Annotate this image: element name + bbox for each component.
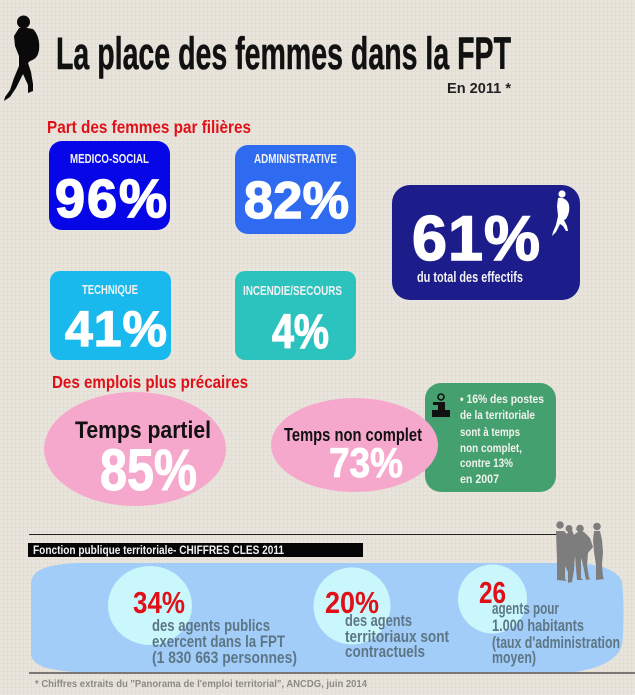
panel: medico-social: MEDICO-SOCIAL [70,151,149,166]
panel: technique [50,271,171,360]
heading bar: chiffres cles: Fonction publique territoriale- CHIFFRES CLES 2011 [33,543,284,557]
stat: 20%: contractuels [345,642,425,661]
stat: 34%: exercent dans la FPT [152,632,285,651]
panel: total 61%: 61% [412,204,540,274]
source footnote: * Chiffres extraits du "Panorama de l'emploi territorial", ANCDG, juin 2014 [35,679,367,690]
panel: administrative [235,145,356,234]
panel: medico-social: 96% [55,169,167,229]
panel: technique: 41% [65,301,167,357]
panel: total 61% [392,185,580,300]
note text: en 2007 [460,472,499,486]
note text: • 16% des postes [460,392,544,406]
note text: non complet, [460,441,522,455]
panel: temps non complet: Temps non complet [284,425,422,445]
panel: medico-social [49,141,170,230]
panel: total 61%: du total des effectifs [417,269,523,286]
stat: 20%: 20% [325,585,379,620]
panel: temps partiel: 85% [100,438,197,503]
stat: 20%: territoriaux sont [345,627,449,646]
icon: walking woman silhouette [4,16,39,101]
date note: En 2011 * [447,80,511,97]
stat: 34%: (1 830 663 personnes) [152,648,297,667]
panel: administrative: ADMINISTRATIVE [254,151,337,166]
panel: incendie/secours: 4% [272,306,329,359]
panel: incendie/secours: INCENDIE/SECOURS [243,283,342,298]
stat: 34%: 34% [133,585,185,620]
stat: 26: 26 [479,575,506,610]
stat: 20% [314,568,449,661]
stat: 34%: des agents publics [152,616,270,635]
stat: 20%: des agents [345,611,412,630]
note text: de la territoriale [460,408,535,422]
stat: 34% [108,566,297,667]
stat: 26: agents pour [492,599,559,618]
stat: 26 [458,564,620,667]
icon: information [432,394,450,417]
panel: administrative: 82% [244,172,349,230]
panel: info note [425,383,556,492]
stat: 26: moyen) [492,648,536,667]
note text: contre 13% [460,456,513,470]
note text [460,392,544,486]
stat: 26: 1.000 habitants [492,616,584,635]
panel: temps partiel [44,392,226,506]
note text: sont à temps [460,425,520,439]
icon: white walking woman [552,190,569,236]
panel: temps partiel: Temps partiel [75,417,211,444]
heading: des emplois plus precaires: Des emplois plus précaires [52,372,248,392]
icon: group of women silhouettes [556,521,604,583]
panel: temps non complet [271,398,438,492]
heading: part des femmes par filieres: Part des femmes par filières [47,117,251,137]
panel: key figures background [31,563,624,672]
panel: temps non complet: 73% [329,439,403,486]
panel: incendie/secours [235,271,356,360]
panel: technique: TECHNIQUE [82,282,138,297]
